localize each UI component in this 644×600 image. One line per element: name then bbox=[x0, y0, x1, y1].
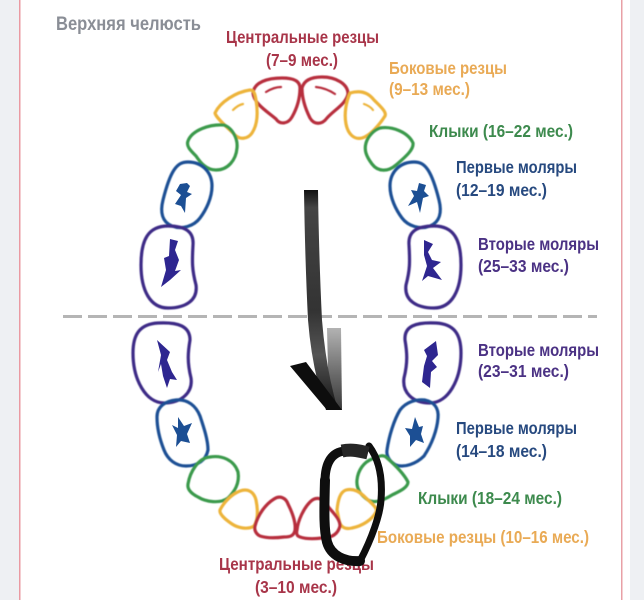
dashed jaw divider bbox=[63, 315, 597, 318]
label: upper second molars: Вторые моляры bbox=[478, 234, 599, 254]
label: upper central incisors bbox=[226, 27, 379, 70]
label: upper lateral incisors: Боковые резцы bbox=[389, 58, 507, 78]
lower canines bbox=[188, 456, 408, 502]
label: lower second molars bbox=[478, 340, 599, 381]
lower central incisors bbox=[255, 497, 340, 539]
label: lower central incisors bbox=[219, 554, 374, 597]
label: upper first molars bbox=[456, 157, 577, 200]
label: lower central incisors: (3–10 мес.) bbox=[255, 577, 337, 597]
upper first molars bbox=[162, 162, 440, 228]
label: lower central incisors: Центральные резцы bbox=[219, 554, 374, 574]
label: upper lateral incisors bbox=[389, 58, 507, 99]
label: upper canines: Клыки (16–22 мес.) bbox=[429, 121, 573, 141]
label: upper central incisors: Центральные резцы bbox=[226, 27, 379, 47]
label: upper second molars: (25–33 мес.) bbox=[478, 256, 569, 276]
label: upper first molars: Первые моляры bbox=[456, 157, 577, 177]
label: upper lateral incisors: (9–13 мес.) bbox=[389, 79, 470, 99]
upper canines bbox=[187, 125, 413, 170]
label: lower first molars: (14–18 мес.) bbox=[456, 441, 547, 461]
hand-drawn black arrow bbox=[290, 190, 342, 410]
lower lateral incisors bbox=[220, 489, 376, 529]
upper lateral incisors bbox=[215, 90, 385, 138]
label: lower first molars bbox=[456, 418, 577, 461]
upper central incisors bbox=[253, 77, 348, 123]
label: lower first molars: Первые моляры bbox=[456, 418, 577, 438]
lower first molars bbox=[157, 400, 438, 466]
label: upper first molars: (12–19 мес.) bbox=[456, 180, 547, 200]
label: lower second molars: Вторые моляры bbox=[478, 340, 599, 360]
jaw diagram bbox=[133, 77, 461, 539]
molar fissures bbox=[172, 183, 429, 447]
label: lower lateral incisors: Боковые резцы (10–16 мес.) bbox=[377, 527, 589, 547]
label: lower second molars: (23–31 мес.) bbox=[478, 361, 569, 381]
label: lower canines: Клыки (18–24 мес.) bbox=[418, 488, 562, 508]
label: upper central incisors: (7–9 мес.) bbox=[266, 50, 338, 70]
heading: upper jaw: Верхняя челюсть bbox=[56, 14, 201, 35]
upper second molars bbox=[141, 226, 461, 308]
hand-drawn black circle bbox=[324, 446, 381, 561]
lower second molars bbox=[133, 323, 461, 403]
label: upper second molars bbox=[478, 234, 599, 276]
